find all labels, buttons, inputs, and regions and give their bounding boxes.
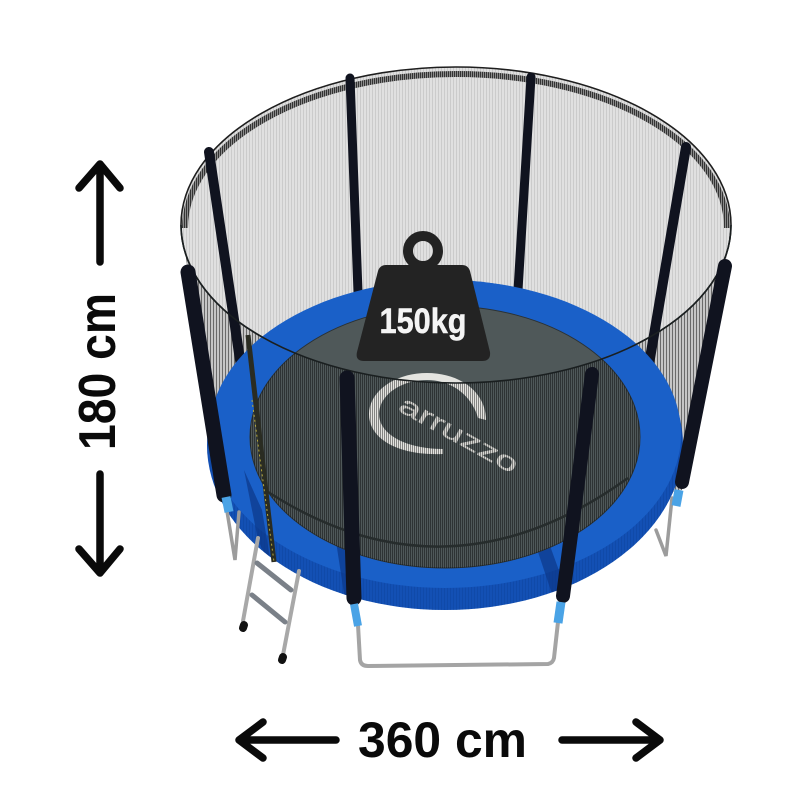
width arrow right (562, 722, 660, 758)
blue safety pad (207, 280, 683, 610)
enclosure net front sides (181, 225, 731, 500)
width label: 360 cm (358, 712, 527, 768)
height arrow down (79, 474, 120, 573)
jumping mat (250, 306, 640, 568)
front net over mat (181, 225, 731, 600)
brand logo: arruzzo: arruzzo (394, 389, 524, 479)
back net poles (209, 77, 686, 380)
ladder (243, 538, 299, 660)
width arrow left (239, 722, 336, 758)
enclosure net back (181, 67, 731, 383)
front U-shaped leg (358, 622, 558, 666)
height arrow up (79, 164, 120, 262)
weight label: 150kg (380, 302, 466, 341)
side legs (226, 498, 672, 560)
net rim band (181, 67, 731, 383)
front net poles (188, 266, 725, 626)
infographic: trampoline with dimensions (75, 66, 732, 762)
brand logo: arruzzo (369, 373, 524, 479)
pad shadows (244, 470, 559, 596)
ladder strap (248, 335, 274, 562)
height label: 180 cm (69, 293, 127, 450)
weight icon (357, 236, 490, 361)
